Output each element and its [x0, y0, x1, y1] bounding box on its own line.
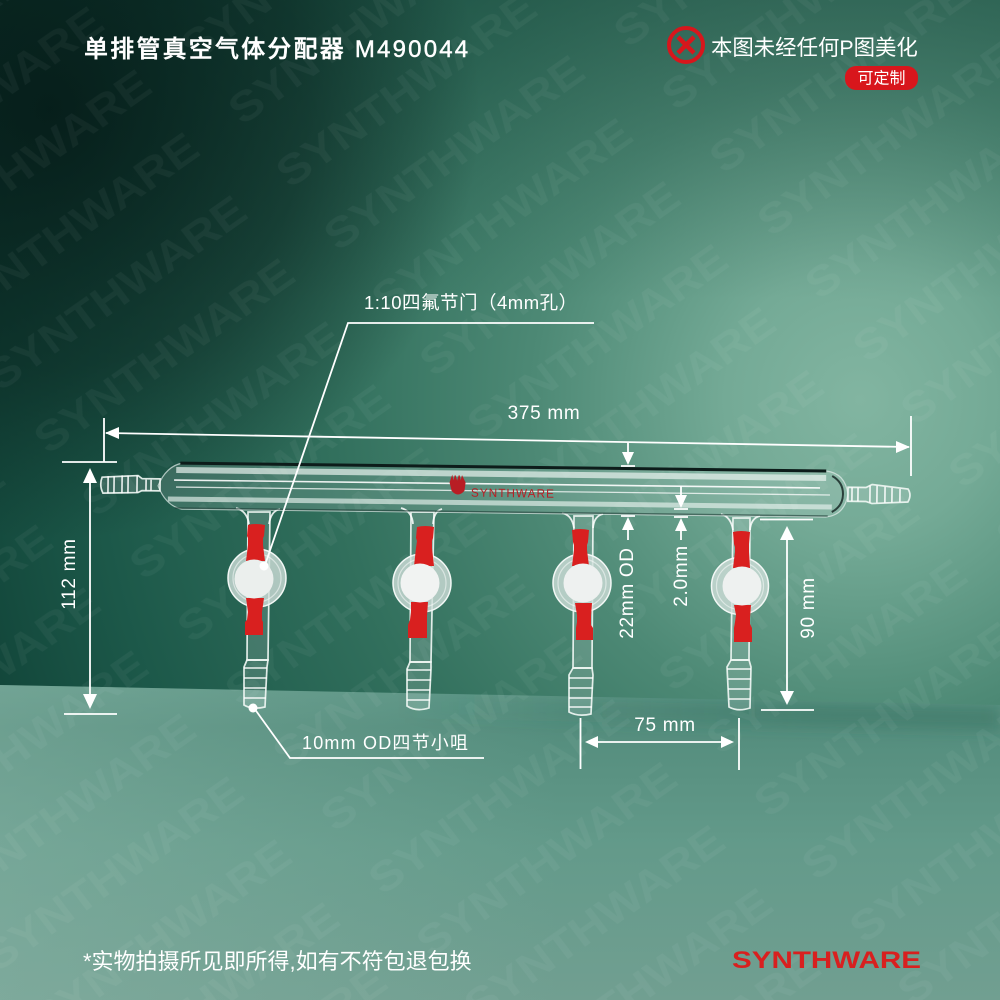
- hose nipple: [569, 668, 593, 715]
- dimension: tube diameter 22mm OD: [617, 442, 638, 639]
- right hose nipple: [848, 484, 910, 504]
- dimension: tube diameter 22mm OD: 22mm OD: [617, 547, 638, 639]
- dimension: stem spacing 75 mm: 75 mm: [634, 715, 696, 736]
- leader line: [265, 323, 594, 565]
- white knob: [234, 560, 274, 598]
- white knob: [564, 564, 602, 602]
- red seal bottom: [245, 598, 264, 635]
- white knob: [400, 564, 440, 602]
- stopcock plate: [553, 554, 611, 612]
- dimension: height 112 mm: 112 mm: [59, 538, 80, 610]
- dimension: overall length 375 mm: 375 mm: [508, 403, 580, 424]
- dimension: overall length 375 mm: [104, 403, 911, 476]
- left hose nipple: [101, 475, 160, 494]
- dimension: wall thickness 2.0mm: 2.0mm: [671, 545, 692, 607]
- main horizontal tube: [100, 462, 910, 518]
- stopcock plate: [228, 549, 286, 607]
- stopcock plate: [712, 558, 768, 614]
- dimension: stem height 90 mm: [760, 520, 819, 710]
- leader dot: [260, 562, 268, 570]
- leader dot: [248, 704, 258, 712]
- tube logo: [450, 475, 555, 501]
- stopcock plate: [393, 554, 451, 612]
- badge: customizable: 可定制: [857, 70, 906, 88]
- red seal top: [414, 526, 434, 566]
- hose nipple: [407, 662, 431, 710]
- red seal top: [246, 524, 265, 561]
- white knob: [722, 566, 762, 606]
- logo wordmark: SYNTHWARE: [471, 486, 555, 501]
- notice text: 本图未经任何P图美化: [711, 36, 918, 60]
- icon: red cross in circle: [669, 28, 703, 62]
- footnote: *实物拍摄所见即所得,如有不符包退包换: [83, 949, 472, 974]
- red seal top: [733, 531, 750, 568]
- background table surface: [0, 685, 1000, 1000]
- red seal top: [572, 529, 589, 566]
- dimension: height 112 mm: [59, 462, 117, 714]
- hose nipple: [727, 660, 751, 710]
- stem 3 with stopcock: [553, 513, 611, 715]
- notice: not retouched: [669, 28, 918, 62]
- tube body: [158, 463, 848, 517]
- red seal bottom: [734, 605, 752, 642]
- hose nipple: [244, 660, 268, 708]
- glass highlights: [168, 463, 843, 516]
- stem 1 with stopcock: [228, 508, 286, 708]
- callout: hose nipple label: [248, 704, 484, 758]
- dimension: stem height 90 mm: 90 mm: [798, 577, 819, 639]
- stem 4 with stopcock: [712, 514, 768, 710]
- stem 2 with stopcock: [393, 508, 451, 710]
- callout: stopcock label: [260, 292, 594, 570]
- dimension: stem spacing 75 mm: [580, 715, 739, 770]
- glass manifold: [100, 462, 910, 715]
- callout text: 10mm OD四节小咀: [302, 733, 469, 753]
- dimension: wall thickness 2.0mm: [671, 486, 692, 607]
- red seal bottom: [575, 603, 593, 640]
- red seal bottom: [408, 602, 428, 638]
- logo mark: [450, 475, 465, 494]
- badge: customizable: [845, 66, 918, 90]
- callout text: 1:10四氟节门（4mm孔）: [364, 292, 578, 313]
- leader line: [254, 708, 484, 758]
- brand logo: SYNTHWARE: [732, 947, 921, 974]
- title: 单排管真空气体分配器 M490044: [84, 36, 470, 63]
